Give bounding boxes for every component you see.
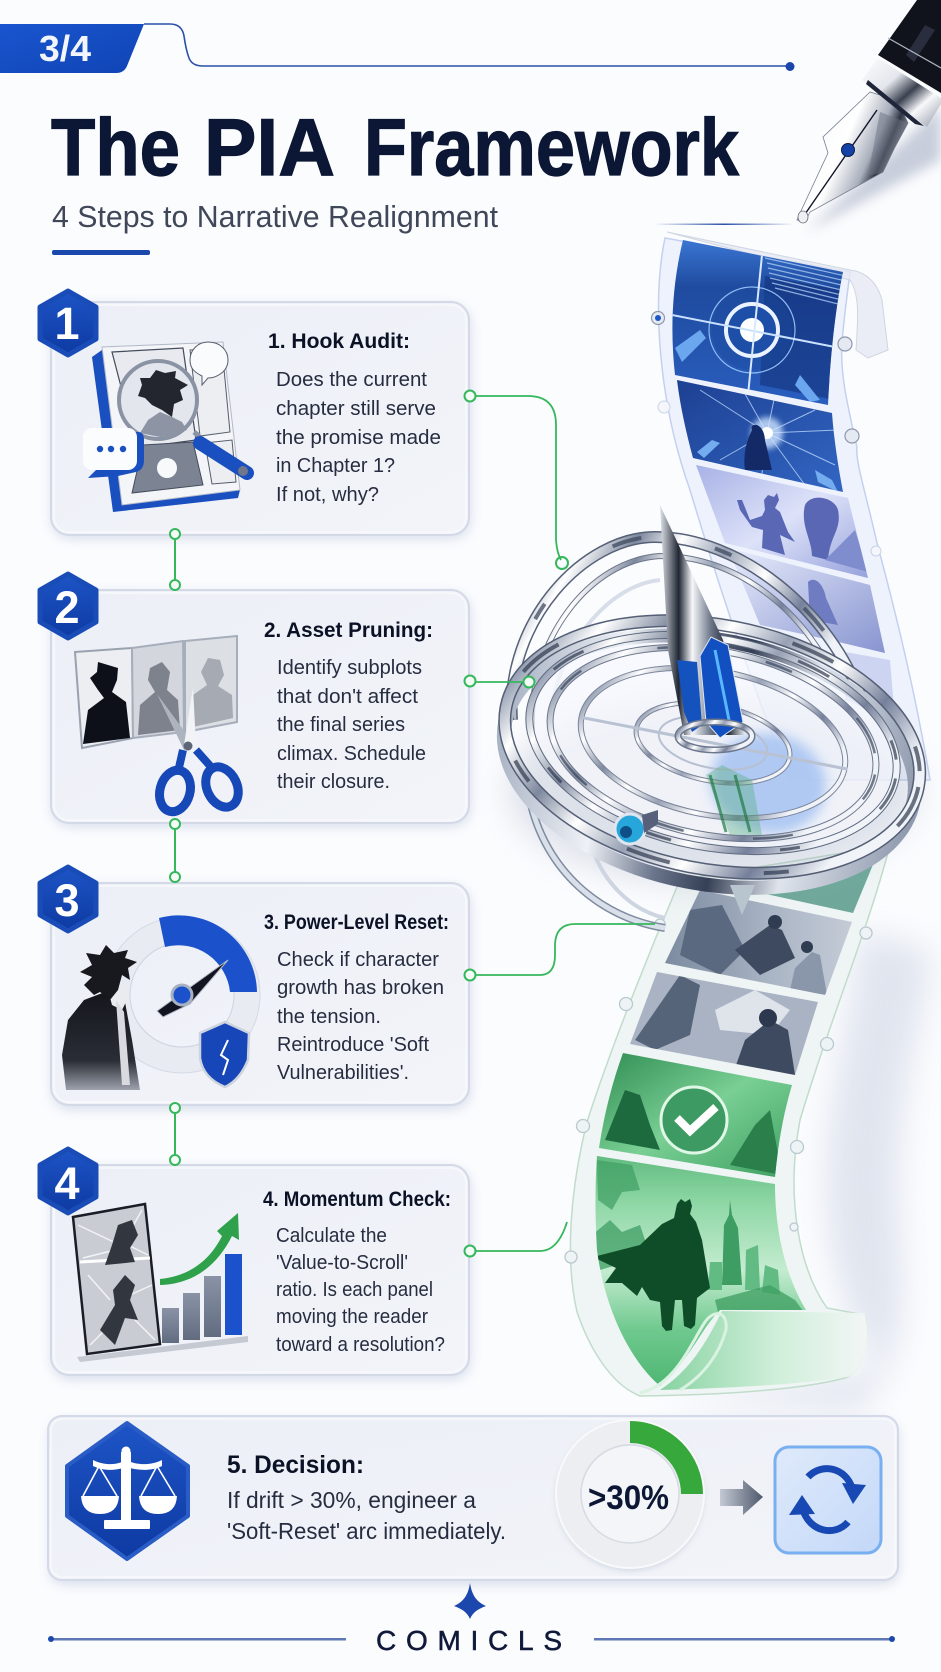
- icon: power gauge: [62, 915, 260, 1090]
- badge: step 4: 4: [54, 1158, 80, 1209]
- step 4 text: 'Value-to-Scroll': [276, 1251, 408, 1274]
- step 1 text: [268, 330, 441, 506]
- step 1 text: If not, why?: [276, 483, 379, 506]
- step 2 text: their closure.: [277, 770, 390, 793]
- decision text: 5. Decision:: [227, 1451, 364, 1479]
- comic panel: hero silhouette: [696, 465, 868, 578]
- step 1 text: Does the current: [276, 368, 427, 391]
- panel: step 2: [51, 590, 470, 826]
- step 2 text: Identify subplots: [277, 656, 422, 679]
- panel: step 3: [51, 883, 470, 1109]
- step 4 text: moving the reader: [276, 1305, 428, 1328]
- comic panel: green check: [595, 1050, 795, 1180]
- lens jewel: [615, 814, 645, 844]
- comic panel: faded scene: [728, 548, 885, 653]
- title: Framework: [364, 103, 740, 193]
- badge: step 3: 3: [54, 875, 80, 926]
- vertical connector: step 1 to 2: [170, 529, 180, 590]
- step 3 text: Reintroduce 'Soft: [277, 1033, 429, 1056]
- step 3 text: the tension.: [277, 1005, 381, 1028]
- badge: step 2: [40, 574, 96, 638]
- badge: step 1: [40, 291, 96, 355]
- step 2 text: that don't affect: [277, 685, 418, 708]
- step 1 text: 1. Hook Audit:: [268, 330, 410, 353]
- badge: step 1: 1: [54, 298, 80, 349]
- panel: film strip shadow: [660, 930, 930, 1410]
- step 4 text: 4. Momentum Check:: [263, 1188, 451, 1211]
- comic panel: burst: [677, 380, 843, 492]
- step 4 text: toward a resolution?: [276, 1333, 445, 1356]
- step 3 text: Vulnerabilities'.: [277, 1061, 409, 1084]
- vertical connector: step 2 to 3: [170, 819, 180, 882]
- blue crystal: [700, 637, 743, 738]
- gyroscope: [480, 505, 941, 928]
- icon: fountain pen: [654, 0, 941, 232]
- vertical connector: step 3 to 4: [170, 1103, 180, 1165]
- donut chart: drift threshold: [556, 1420, 704, 1568]
- connector: step 4 to film strip: [464, 1222, 567, 1256]
- donut chart: drift threshold: >30%: [588, 1479, 669, 1517]
- title: [51, 103, 740, 193]
- badge: step 2: 2: [54, 582, 80, 633]
- step 3 text: growth has broken: [277, 976, 444, 999]
- decision text: [227, 1451, 506, 1544]
- logo star: [454, 1583, 486, 1619]
- page-number tab: [0, 24, 794, 73]
- comic panel: target lock: [672, 240, 843, 405]
- step 1 text: the promise made: [276, 426, 441, 449]
- footer rule left: [48, 1636, 346, 1642]
- connector: step 2 to gyroscope: [464, 676, 534, 688]
- film curl: [660, 1311, 868, 1390]
- gimbal ring: [512, 537, 862, 720]
- connector: step 1 to gyroscope: [464, 390, 568, 569]
- hero figure: [593, 1199, 710, 1331]
- film strip: upper section: [652, 232, 930, 780]
- step 4 text: [263, 1188, 451, 1356]
- step 1 text: chapter still serve: [276, 397, 436, 420]
- step 3 text: 3. Power-Level Reset:: [264, 911, 449, 934]
- page-number tab: 3/4: [39, 28, 91, 69]
- step 4 text: Calculate the: [276, 1224, 387, 1247]
- step 3 text: Check if character: [277, 948, 439, 971]
- title: PIA: [204, 103, 335, 193]
- badge: step 3: [40, 867, 96, 931]
- film strip: lower section: [565, 845, 890, 1396]
- decision text: 'Soft-Reset' arc immediately.: [227, 1518, 506, 1544]
- decision text: If drift > 30%, engineer a: [227, 1487, 476, 1513]
- spike: [660, 505, 745, 735]
- step 3 text: [264, 911, 449, 1084]
- subtitle: 4 Steps to Narrative Realignment: [52, 199, 498, 234]
- icon: character panels and scissors: [75, 636, 244, 815]
- arrow: [720, 1480, 763, 1515]
- connector: step 3 to film strip: [464, 924, 655, 980]
- comic panel: grey hero: [630, 972, 818, 1075]
- step 2 text: climax. Schedule: [277, 742, 426, 765]
- comic panel: grey confrontation: [665, 890, 852, 995]
- icon: refresh: [775, 1447, 881, 1553]
- panel: step 1: [51, 302, 470, 538]
- step 4 text: ratio. Is each panel: [276, 1278, 433, 1301]
- badge: step 4: [40, 1149, 96, 1213]
- icon: comic page and rising bars: [73, 1204, 248, 1362]
- step 2 text: the final series: [277, 713, 405, 736]
- step 2 text: 2. Asset Pruning:: [264, 619, 433, 642]
- title accent bar: [52, 250, 150, 255]
- icon: comic book and magnifier: [83, 342, 248, 512]
- comic panel: green sliver: [757, 855, 877, 913]
- panel: step 4: [51, 1165, 470, 1379]
- panel: decision: [48, 1416, 898, 1584]
- step 1 text: in Chapter 1?: [276, 454, 395, 477]
- brand name: COMICLS: [376, 1625, 562, 1656]
- step 2 text: [264, 619, 433, 793]
- comic panel: hero and city: [596, 1156, 806, 1386]
- title: The: [51, 103, 180, 193]
- icon: scales of justice: [67, 1423, 188, 1559]
- spike point below: [730, 885, 755, 915]
- footer rule right: [594, 1636, 895, 1642]
- disc interior: [506, 601, 920, 885]
